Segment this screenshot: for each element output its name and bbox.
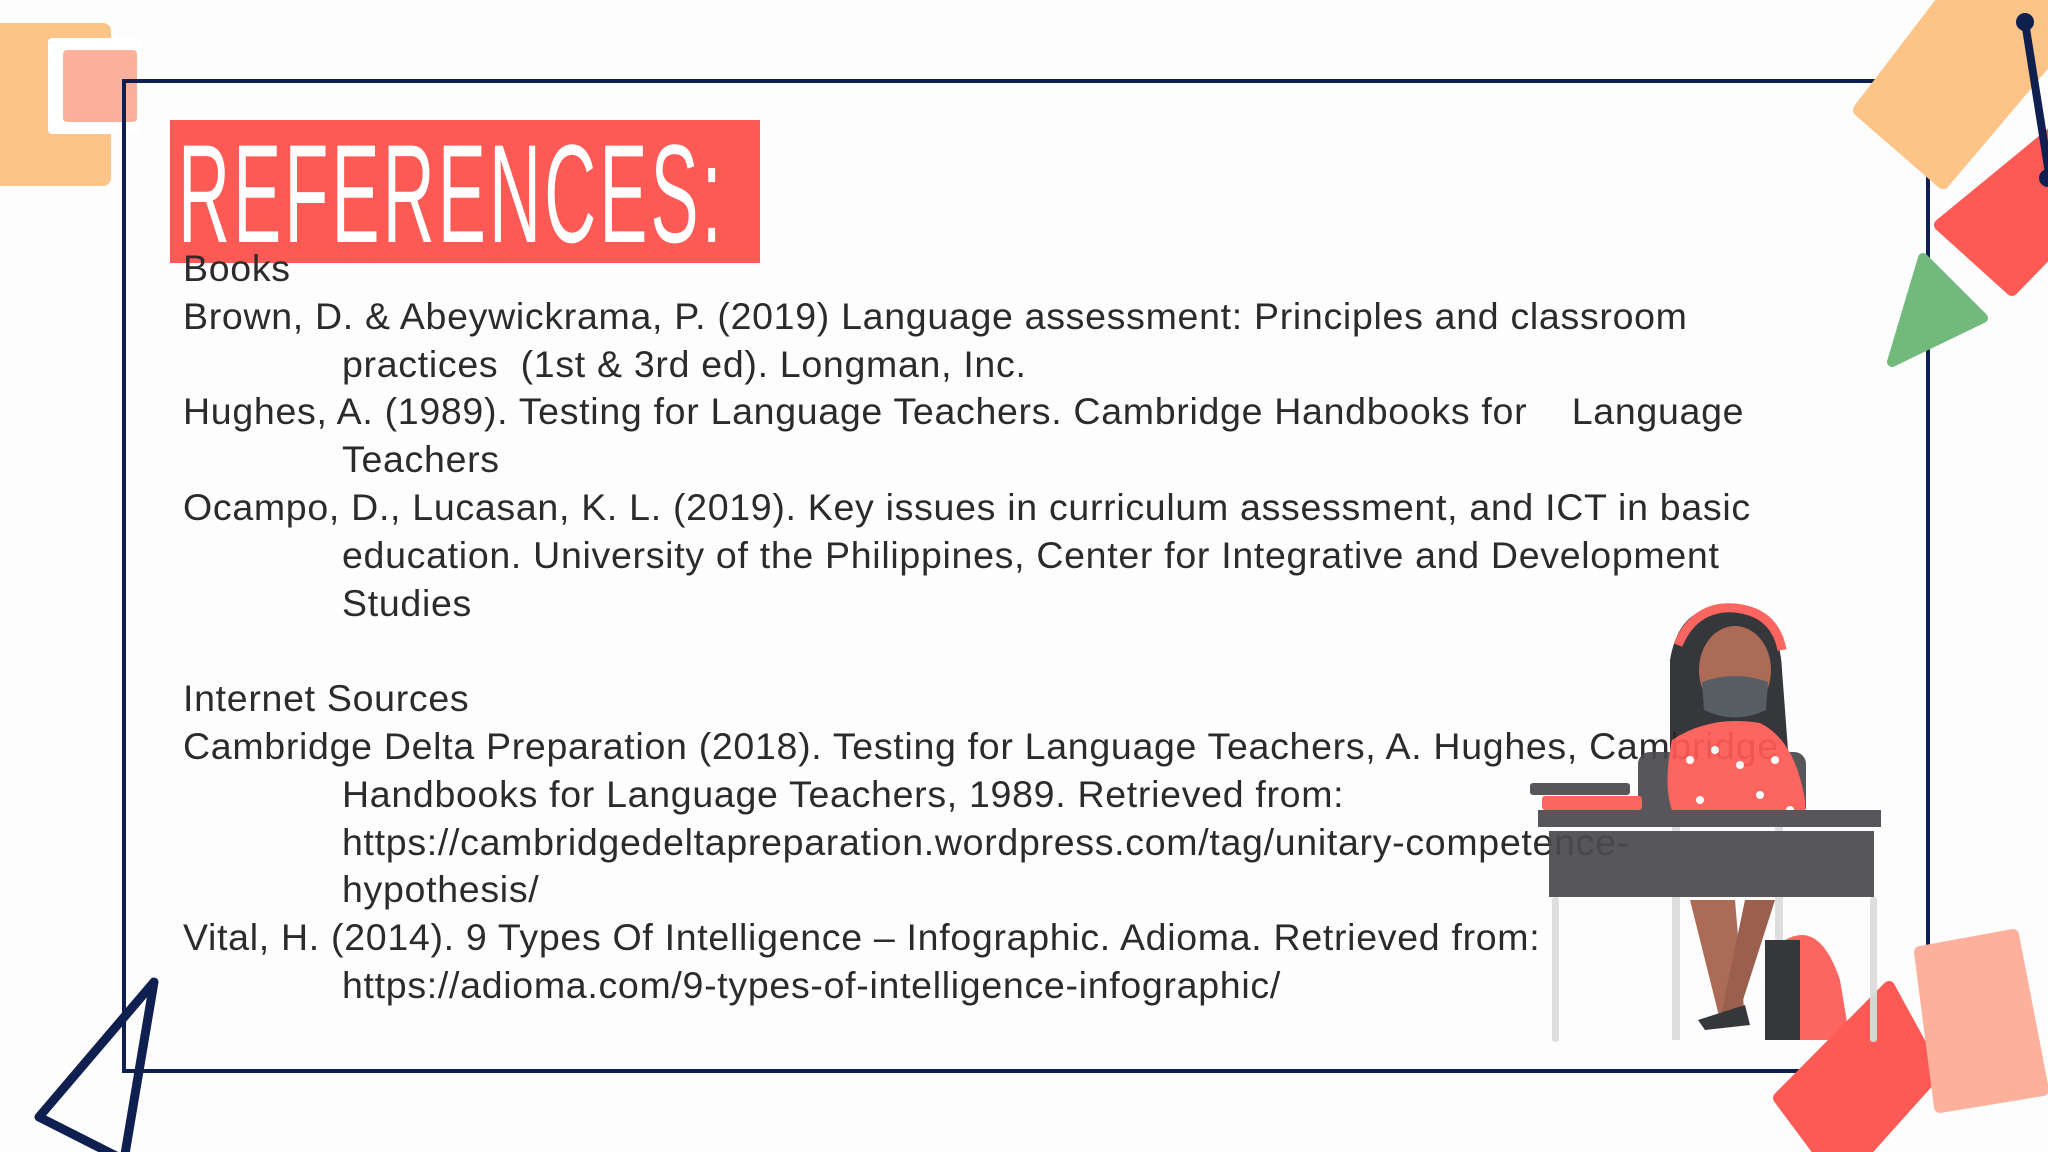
text block: references: Handbooks for Language Teachers, 1989. Retrieved from: <box>342 773 1344 815</box>
text block: references: education. University of the Philippines, Center for Integrative and Development <box>342 534 1720 576</box>
text block: references: https://cambridgedeltapreparation.wordpress.com/tag/unitary-competence- <box>342 821 1630 863</box>
text block: references: hypothesis/ <box>342 868 539 910</box>
text block: references: Brown, D. & Abeywickrama, P. (2019) Language assessment: Principles and classroom <box>183 295 1688 337</box>
text block: references: https://adioma.com/9-types-of-intelligence-infographic/ <box>342 964 1281 1006</box>
text block: references: Vital, H. (2014). 9 Types Of Intelligence – Infographic. Adioma. Retrieved from: <box>183 916 1540 958</box>
frame <box>122 79 1930 1073</box>
text block: references: Hughes, A. (1989). Testing for Language Teachers. Cambridge Handbooks for Language <box>183 390 1744 432</box>
illustration: girl at desk <box>1530 603 1881 1042</box>
text block: references: Internet Sources <box>183 677 469 719</box>
decoration: bottom-right shapes <box>1773 929 2048 1152</box>
text block: references: Books <box>183 247 291 289</box>
text block: references: Studies <box>342 582 472 624</box>
text block: references: Ocampo, D., Lucasan, K. L. (2019). Key issues in curriculum assessment, and ICT in basic <box>183 486 1751 528</box>
decoration: bottom-left triangle <box>34 978 158 1152</box>
text block: references <box>183 247 1779 1006</box>
decoration: top-left shapes <box>0 23 137 186</box>
decoration: top-right shapes <box>1853 0 2048 367</box>
text block: references: Cambridge Delta Preparation (2018). Testing for Language Teachers, A. Hughes, Cambridge <box>183 725 1779 767</box>
text block: references: practices (1st & 3rd ed). Longman, Inc. <box>342 343 1027 385</box>
text block: references: Teachers <box>342 438 500 480</box>
